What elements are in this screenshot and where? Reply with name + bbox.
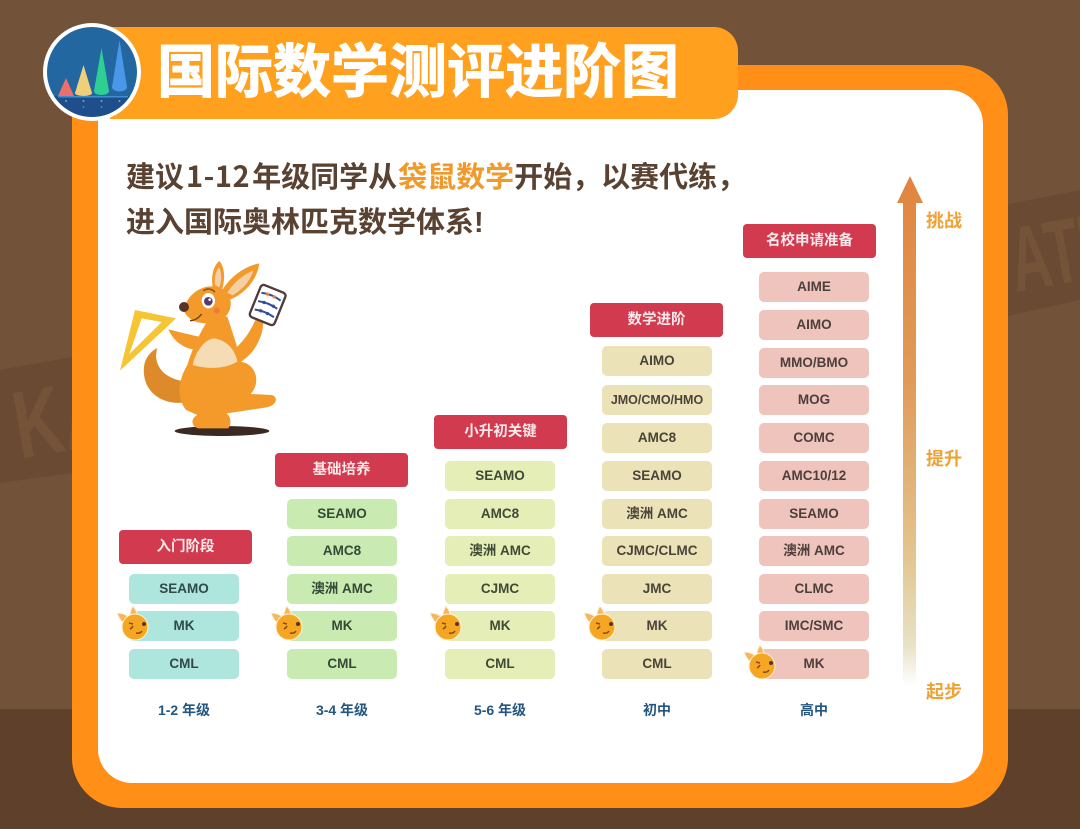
watermark bands: KA [5,357,119,480]
label: 提升: 提升 [926,449,962,469]
pill: MK [287,611,397,641]
icon: kangaroo head 3 [429,605,462,640]
grade label: 高中 [800,702,828,718]
pill: IMC/SMC [759,611,869,641]
pill: CML: CML [485,656,515,671]
orange frame with white panel [72,65,1008,808]
grade label: 初中 [643,702,671,718]
header: 名校申请准备: 名校申请准备 [766,233,853,249]
pill: CLMC [759,574,869,604]
header: 数学进阶: 数学进阶 [628,312,686,328]
pill: MK: MK [174,618,194,633]
header: 小升初关键 [434,415,567,449]
pill: JMO/CMO/HMO: JMO/CMO/HMO [611,393,703,407]
header: 名校申请准备 [743,224,876,258]
pill: JMO/CMO/HMO [602,385,712,415]
pill: MMO/BMO: MMO/BMO [780,355,848,370]
pill: SEAMO: SEAMO [159,581,209,596]
pill: SEAMO: SEAMO [789,506,839,521]
pill: 澳洲 AMC [602,499,712,529]
header: 小升初关键: 小升初关键 [464,424,537,440]
pill: IMC/SMC: IMC/SMC [785,618,843,633]
pill: SEAMO [445,461,555,491]
illustration: kangaroo mascot [120,261,287,436]
pill: AMC8 [602,423,712,453]
pill: AMC8: AMC8 [323,543,361,558]
pill: MK: MK [804,656,824,671]
grade label: 5-6 年级 [474,702,526,718]
pill: 澳洲 AMC [759,536,869,566]
icon: kangaroo head 5 [743,644,776,680]
pill: 澳洲 AMC [445,536,555,566]
subtitle text [126,154,746,239]
pill: 澳洲 AMC: 澳洲 AMC [783,543,845,558]
pill: CML [129,649,239,679]
header: 入门阶段 [119,530,252,564]
pill: SEAMO: SEAMO [317,506,367,521]
pill: CML [445,649,555,679]
pill: SEAMO [287,499,397,529]
grade label: 1-2 年级 [158,702,210,718]
arrow: progress gradient [897,176,923,680]
pill: AMC8: AMC8 [638,430,676,445]
pill: MK: MK [646,618,668,633]
pill: MK [759,649,869,679]
pill: AMC8 [445,499,555,529]
background lower band [0,709,1080,829]
pill: MK [602,611,712,641]
pill: 澳洲 AMC: 澳洲 AMC [626,506,688,521]
pill: 澳洲 AMC: 澳洲 AMC [469,543,531,558]
pill: CML: CML [327,656,357,671]
pill: AIMO: AIMO [796,317,832,332]
pill: COMC [759,423,869,453]
label: 挑战: 挑战 [926,211,962,231]
pill: SEAMO [602,461,712,491]
pill: AIMO: AIMO [639,353,675,368]
pill: MK: MK [332,618,352,633]
title bar [110,27,738,119]
pill: CLMC: CLMC [794,581,834,596]
pill: AIMO [602,346,712,376]
subtitle text: 建议1-12年级同学从袋鼠数学开始，以赛代练， [126,154,746,196]
pill: SEAMO [129,574,239,604]
subtitle text: 进入国际奥林匹克数学体系! [126,207,484,239]
pill: AIME [759,272,869,302]
pill: SEAMO: SEAMO [632,468,682,483]
pill: MK [129,611,239,641]
pill: MOG: MOG [798,392,830,407]
icon: chart badge [43,23,141,121]
icon: kangaroo head 4 [583,605,616,640]
pill: 澳洲 AMC: 澳洲 AMC [311,581,373,596]
pill: COMC: COMC [793,430,835,445]
pill: AMC10/12 [759,461,869,491]
pill: AMC8: AMC8 [481,506,519,521]
pill: AIME: AIME [797,279,831,294]
pill: CJMC/CLMC [602,536,712,566]
pill: JMC [602,574,712,604]
pill: JMC: JMC [643,581,671,596]
pill: MOG [759,385,869,415]
pill: MK: MK [490,618,510,633]
pill: MK [445,611,555,641]
header: 入门阶段: 入门阶段 [156,539,214,555]
pill: AIMO [759,310,869,340]
header: 基础培养: 基础培养 [312,462,370,478]
pill: CML: CML [642,656,672,671]
header: 基础培养 [275,453,408,487]
pill: SEAMO [759,499,869,529]
pill: CJMC [445,574,555,604]
pill: AMC8 [287,536,397,566]
pill: CML: CML [169,656,199,671]
pill: CJMC/CLMC: CJMC/CLMC [616,543,698,558]
pill: CJMC: CJMC [481,581,519,596]
pill: 澳洲 AMC [287,574,397,604]
icon: kangaroo head 1 [116,605,148,640]
pill: MMO/BMO [759,348,869,378]
pill: CML [287,649,397,679]
header: 数学进阶 [590,303,723,337]
grade label: 3-4 年级 [316,702,368,718]
pill: CML [602,649,712,679]
pill: SEAMO: SEAMO [475,468,525,483]
title: 国际数学测评进阶图 [157,40,679,105]
pill: AMC10/12: AMC10/12 [782,468,846,483]
icon: kangaroo head 2 [270,605,302,640]
label: 起步: 起步 [926,682,962,702]
